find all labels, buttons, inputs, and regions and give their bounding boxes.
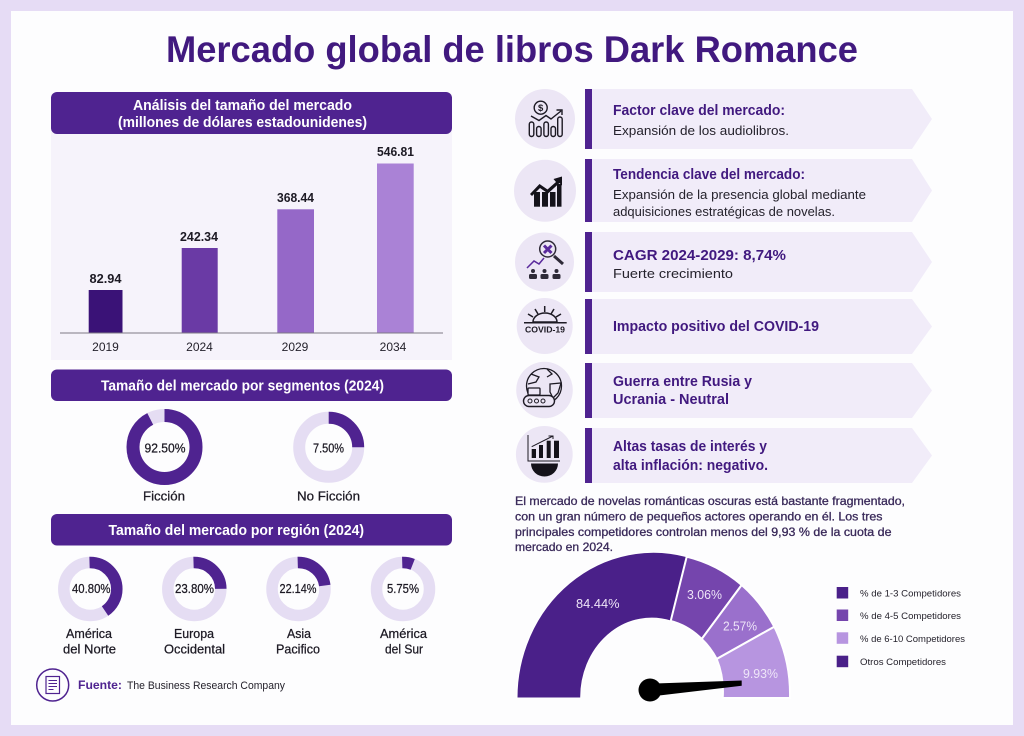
donut: Europa Occidental: Occidental [164,642,225,656]
bar 2034: 2034 [380,340,407,354]
donut: Asia Pacífico: Pacifico [276,642,320,656]
donut: América del Sur [376,562,430,656]
donut: Ficción: 92.50% [144,442,186,456]
row: factor clave: Expansión de los audiolibros. [613,124,789,138]
source: Fuente: [78,678,122,692]
donut: Europa Occidental: 23.80% [175,582,214,596]
gauge segment: 84.44% [517,552,687,698]
donut: Ficción [133,416,196,504]
icon: COVID-19: COVID-19 [525,325,565,335]
icon: globe and tank [516,362,573,418]
legend item: 4-5: % de 4-5 Competidores [860,611,961,622]
donut: América del Norte: 40.80% [72,582,110,596]
row: CAGR [515,232,932,292]
bar 2024: 2024 [186,340,213,354]
bar 2019: 2019 [92,340,119,354]
row: tendencia clave: Tendencia clave del mercado: [613,167,805,183]
gauge segment: 2.57% [702,585,774,659]
row: CAGR: Fuerte crecimiento [613,267,733,281]
donut: Asia Pacífico: Asia [287,627,311,641]
icon: money growth [515,89,575,149]
donut: Asia Pacífico: 22.14% [280,582,316,596]
heading: segments [51,370,452,401]
icon: document [37,669,69,701]
source [37,669,285,701]
gauge segment: 9.93% [717,627,790,698]
gauge label: 9.93%: 9.93% [743,666,778,681]
donut: América del Sur: América [380,627,427,641]
heading: market size: Análisis del tamaño del mercado [133,98,352,114]
donut: América del Sur: 5.75% [387,582,419,596]
gauge segment: 3.06% [671,557,742,639]
heading: market size: (millones de dólares estadounidenes) [118,115,367,131]
bar 2029: 2029 [282,340,309,354]
row: tendencia clave: Expansión de la presencia global mediante [613,188,866,202]
donut: América del Norte: del Norte [63,642,116,656]
paragraph: market fragmentation: El mercado de novelas románticas oscuras está bastante fragmentado, [515,494,905,508]
bar 2034: 546.81 [377,145,414,159]
row: guerra: Ucrania - Neutral [613,392,729,408]
bar 2024 [180,230,218,354]
donut: Ficción: Ficción [143,490,185,504]
heading: region [51,514,452,546]
icon: rising bars [514,160,576,222]
title: Mercado global de libros Dark Romance [166,29,858,70]
donut: América del Norte: América [66,627,112,641]
gauge chart [517,552,790,702]
gauge label: 2.57%: 2.57% [723,618,757,634]
donut: Europa Occidental [164,562,225,656]
donut: América del Norte [63,562,117,656]
bar 2029 [277,191,314,354]
donut: Europa Occidental: Europa [174,627,214,641]
row: factor clave: Factor clave del mercado: [613,103,785,119]
gauge needle [638,678,742,702]
donut: Asia Pacífico [272,562,325,656]
source: The Business Research Company [127,680,285,692]
bar 2019 [89,272,122,354]
icon: magnifier and people [515,232,574,292]
row: guerra [516,362,932,418]
paragraph: market fragmentation: mercado en 2024. [515,540,613,554]
row: tasas de interés: Altas tasas de interés y [613,439,767,455]
heading: segments: Tamaño del mercado por segmentos (2024) [101,378,384,394]
donut: No Ficción: 7.50% [313,442,344,456]
row: COVID-19: Impacto positivo del COVID-19 [613,319,819,335]
heading: region: Tamaño del mercado por región (2024) [108,523,364,539]
legend [837,587,965,668]
bar 2034 [377,145,414,354]
legend item: 6-10: % de 6-10 Competidores [860,634,965,645]
bar 2019: 82.94 [90,272,122,286]
row: COVID-19 [517,298,932,354]
donut: No Ficción: No Ficción [297,490,360,504]
row: tasas de interés [516,426,932,483]
paragraph: market fragmentation: con un gran número de pequeños actores operando en él. Los tres [515,510,883,524]
paragraph: market fragmentation [515,494,905,554]
bar 2024: 242.34 [180,230,218,244]
donut: No Ficción [297,418,360,504]
icon: chart over globe [516,426,573,483]
gauge label: 84.44%: 84.44% [576,596,620,611]
row: tendencia clave [514,159,932,222]
row: factor clave [515,89,932,149]
paragraph: market fragmentation: principales competidores controlan menos del 9,93 % de la cuota de [515,525,892,539]
chart background [51,130,452,360]
gauge label: 3.06%: 3.06% [687,587,722,602]
row: tasas de interés: alta inflación: negativo. [613,458,768,474]
donut: América del Sur: del Sur [385,642,423,656]
icon: COVID-19 [517,298,573,354]
legend item: 1-3: % de 1-3 Competidores [860,589,961,600]
heading: market size [51,92,452,134]
legend item: otros: Otros Competidores [860,657,946,668]
row: guerra: Guerra entre Rusia y [613,374,752,390]
row: CAGR: CAGR 2024-2029: 8,74% [613,248,786,264]
icon: money growth: $ [538,103,544,114]
bar 2029: 368.44 [277,191,314,205]
row: tendencia clave: adquisiciones estratégicas de novelas. [613,205,835,219]
panel: market size bar chart [51,92,452,360]
